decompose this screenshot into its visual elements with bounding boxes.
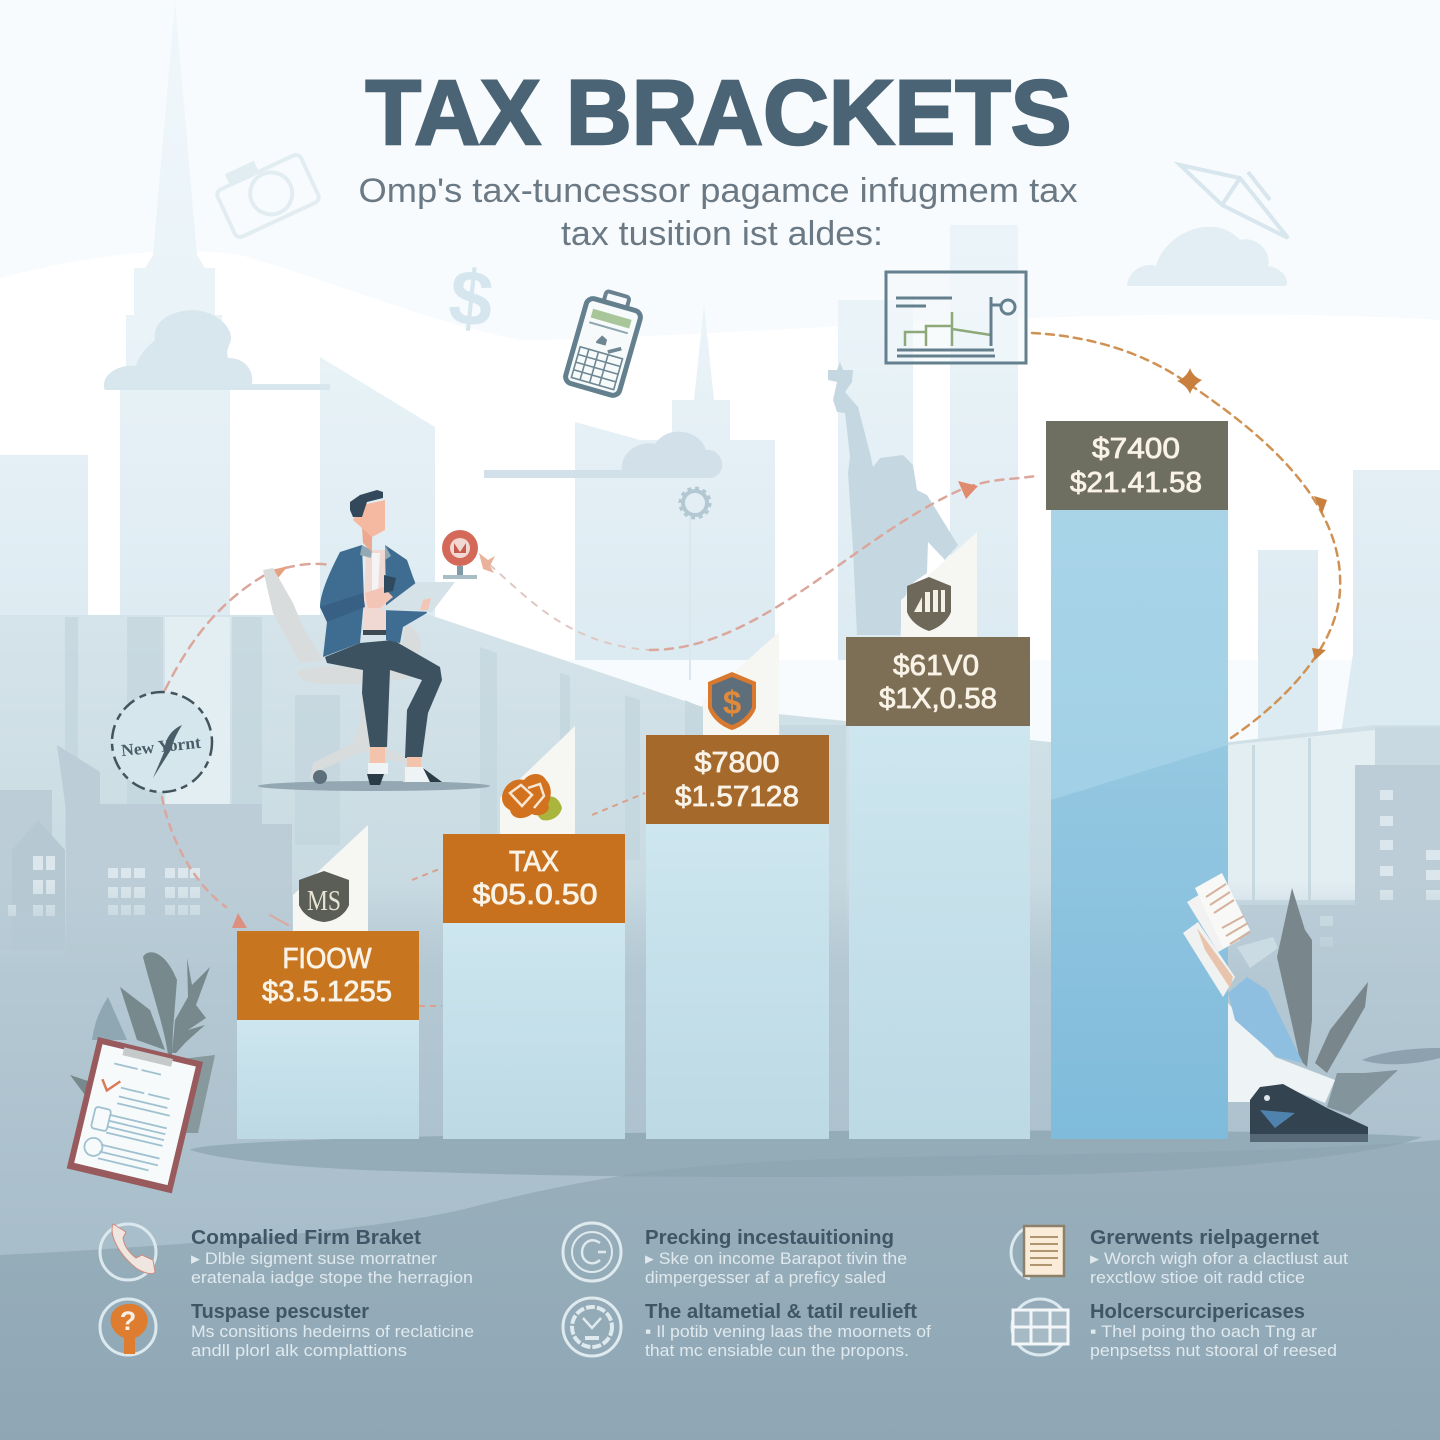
legend item: The altametial and tatil reulieft: that mc ensiable cun the propons.	[645, 1341, 909, 1360]
shoe	[1250, 1084, 1368, 1142]
legend item: Compalied Firm Braket	[100, 1224, 473, 1287]
feet	[370, 747, 421, 768]
icon: copyright rings	[563, 1223, 621, 1281]
clipboard	[67, 1037, 203, 1193]
legend item: Holcerscurcipericases: penpsetss nut stooral of reesed	[1090, 1341, 1337, 1360]
bar 1: $3.5.1255	[262, 976, 392, 1008]
legend item: Grerwents rielpagernet	[1011, 1226, 1348, 1287]
icon: gear	[680, 488, 710, 518]
subtitle	[358, 172, 1078, 253]
bar 3: $1.57128	[675, 781, 799, 813]
legend item: Grerwents rielpagernet: ▸ Worch wigh ofor a clactlust aut	[1090, 1249, 1348, 1268]
legend item: Holcerscurcipericases	[1012, 1299, 1337, 1360]
legend item: Tuspase pescuster: Tuspase pescuster	[191, 1301, 369, 1323]
legend item: Holcerscurcipericases: ▪ Thel poing tho oach Tng ar	[1090, 1322, 1317, 1341]
icon: chart shield	[907, 577, 951, 631]
icon: telephone	[100, 1224, 156, 1280]
icon: location pin	[442, 530, 495, 579]
legend item: Holcerscurcipericases: Holcerscurcipericases	[1090, 1301, 1305, 1323]
legend item: Precking incestauitioning: dimpergesser af a preficy saled	[645, 1268, 886, 1287]
legend item: Grerwents rielpagernet: Grerwents rielpagernet	[1090, 1227, 1319, 1249]
near city	[0, 745, 1440, 955]
legend item: Precking incestauitioning: Precking incestauitioning	[645, 1227, 894, 1249]
legend item: The altametial and tatil reulieft: The altametial & tatil reulieft	[645, 1301, 917, 1323]
ground	[0, 880, 1440, 1280]
title: TAX BRACKETS	[366, 62, 1072, 164]
icon: grid panel	[1012, 1299, 1068, 1355]
legend item: Precking incestauitioning: ▸ Ske on income Barapot tivin the	[645, 1249, 907, 1268]
legend item: Compalied Firm Braket: Compalied Firm Braket	[191, 1227, 421, 1249]
legend item: Precking incestauitioning	[563, 1223, 907, 1287]
bar 2	[443, 726, 625, 1139]
bar 4: $61V0	[893, 650, 979, 682]
jacket	[320, 545, 427, 657]
bar 3: $7800	[694, 747, 780, 779]
dashed arrows: pink route	[162, 476, 1036, 925]
legend item: Compalied Firm Braket: ▸ Dlble sigment suse morratner	[191, 1249, 437, 1268]
chair	[263, 568, 426, 782]
bar 5	[1046, 421, 1228, 1139]
legend item: The altametial and tatil reulieft	[563, 1298, 931, 1360]
bar 5: $21.41.58	[1070, 467, 1202, 499]
legend item: Grerwents rielpagernet: rexctlow stioe oit radd ctice	[1090, 1268, 1305, 1287]
legend item: Compalied Firm Braket: eratenala iadge stope the herragion	[191, 1268, 473, 1287]
dashed links between bars	[412, 793, 645, 1006]
mid skyline	[0, 615, 1440, 960]
icon: question mark: ?	[120, 1306, 136, 1336]
bar 2: $05.0.50	[472, 879, 598, 911]
bar 1: MS	[307, 885, 341, 917]
legend item: Tuspase pescuster: Ms consitions hedeirns of reclaticine	[191, 1322, 474, 1341]
person with documents	[1183, 873, 1368, 1142]
legend item: Tuspase pescuster: andll plorl alk complattions	[191, 1341, 407, 1360]
legs	[325, 640, 442, 758]
plant right	[1277, 888, 1440, 1115]
icon: question mark	[100, 1299, 156, 1355]
badge	[299, 871, 349, 922]
icon: faint cloud left	[104, 310, 330, 390]
icon: clock gear	[563, 1298, 621, 1356]
arrow markers on top right loop	[1177, 368, 1327, 660]
bar 5: $7400	[1092, 433, 1180, 465]
person on office chair	[258, 490, 490, 791]
stamp: New York	[112, 692, 212, 792]
tablet	[380, 582, 455, 612]
icon: calculator	[564, 286, 645, 397]
subtitle: Omp's tax-tuncessor pagamce infugmem tax	[358, 172, 1078, 210]
icon: dollar shield	[708, 672, 756, 730]
icon: coin cluster	[502, 774, 562, 820]
bar 3	[646, 632, 829, 1139]
arrowhead markers	[232, 481, 978, 928]
bar 2: TAX	[509, 846, 559, 878]
icon: faint camera	[211, 144, 321, 239]
icon: chart board	[886, 272, 1026, 363]
plant left	[70, 952, 215, 1133]
icon: faint cloud centre	[484, 432, 722, 478]
bar 4	[846, 532, 1030, 1139]
icon: faint dollar sign: $	[445, 252, 497, 344]
bar 1: FIOOW	[282, 943, 372, 975]
stamp: New York: New Yornt	[120, 733, 202, 760]
icon: dollar shield: $	[723, 684, 741, 721]
head	[362, 527, 372, 552]
thin guide line	[689, 517, 691, 680]
bar 4: $1X,0.58	[879, 683, 997, 715]
shirt	[363, 550, 386, 630]
statue of liberty silhouette	[828, 362, 958, 635]
subtitle: tax tusition ist aldes:	[561, 215, 883, 253]
far skyline	[0, 0, 1440, 740]
icon: faint cloud right	[1127, 227, 1287, 286]
legend item: The altametial and tatil reulieft: ▪ Il potib vening laas the moornets of	[645, 1322, 931, 1341]
legend item: Tuspase pescuster	[100, 1299, 474, 1360]
bar 1	[237, 825, 419, 1139]
icon: faint paper plane	[1180, 165, 1288, 238]
dashed arrow: top right loop	[1032, 333, 1340, 740]
icon: document	[1011, 1226, 1064, 1279]
